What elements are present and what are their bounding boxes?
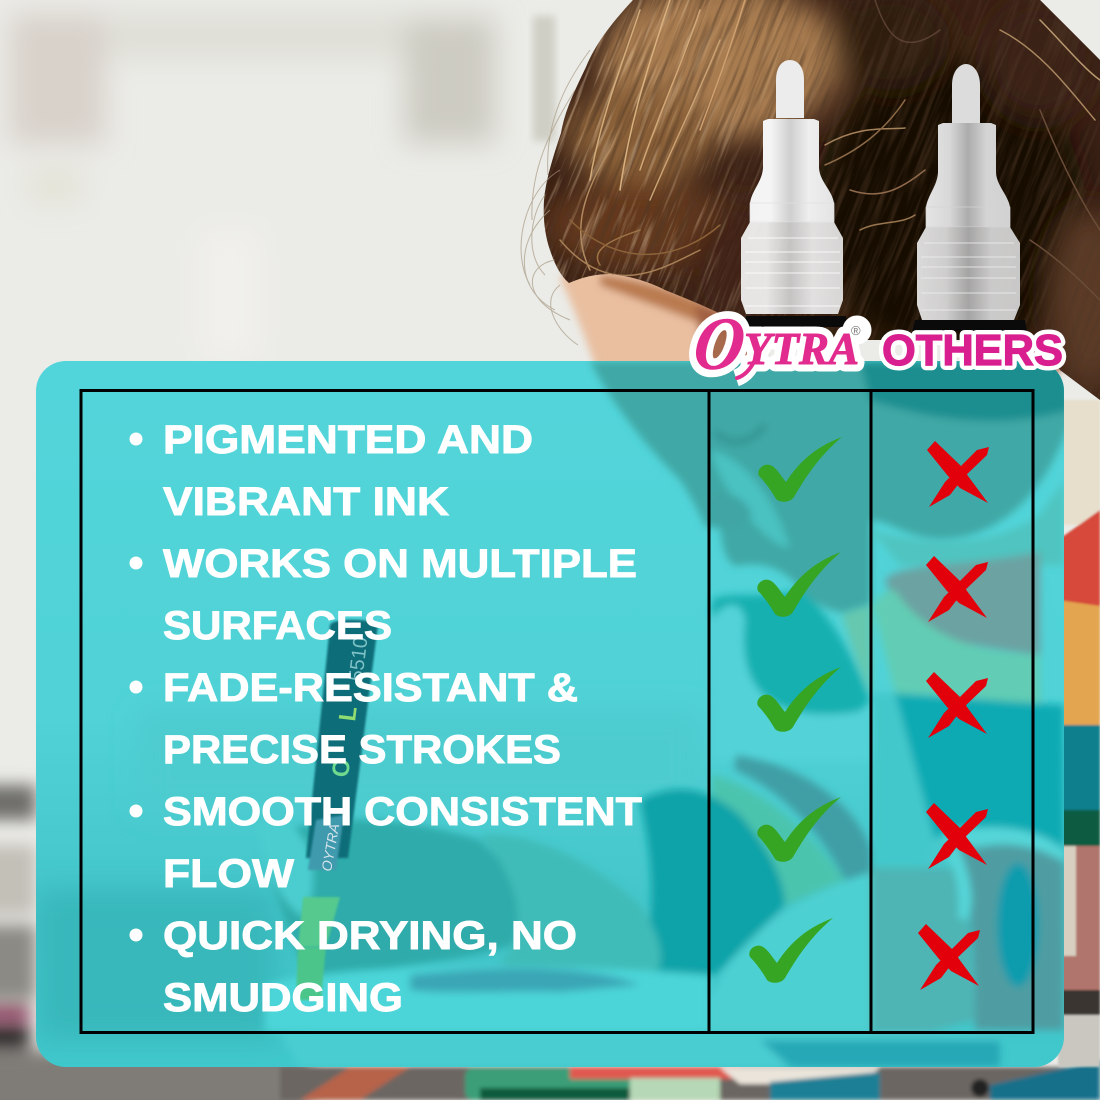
pen held by child: OYTRA [318,822,342,873]
icon: red cross marks column [918,441,989,990]
feature 2: WORKS ON MULTIPLE [163,542,637,586]
hair [544,0,1100,400]
skin: neck and ear [560,268,1062,375]
pen held by child: L [334,705,363,723]
pen held by child [296,620,378,1000]
feature list [130,418,642,1020]
feature 4 [130,790,642,896]
feature 4: FLOW [163,852,294,896]
logo: Oytra: YTRA [744,323,859,374]
label: OTHERS: OTHERS [882,326,1063,375]
logo: Oytra: YTRA [744,323,859,374]
pen held by child: C [327,758,356,779]
feature 3: PRECISE STROKES [163,728,561,772]
sweater right edge [1058,400,1100,1067]
logo: Oytra: O [689,301,751,386]
feature 1: PIGMENTED AND [163,418,533,462]
feature 3: FADE-RESISTANT & [163,666,578,710]
feature 5: SMUDGING [163,976,403,1020]
feature 1 [130,418,533,524]
feature 5: QUICK DRYING, NO [163,914,577,958]
pen held by child: 5510 [345,636,372,683]
marker tip: others [912,64,1027,331]
feature 5 [130,914,577,1020]
feature 4: SMOOTH CONSISTENT [163,790,642,834]
logo: Oytra [689,301,864,386]
hair strand texture: dark [544,0,1100,399]
logo: Oytra: O [689,301,751,386]
panel: translucent teal comparison panel [36,361,1070,1067]
feature 1: VIBRANT INK [163,480,449,524]
hair strand lines [560,0,1100,300]
feature 3 [130,666,578,772]
icon: green check marks column [749,437,842,983]
frizzy hair edge [521,50,590,345]
label: OTHERS: OTHERS [882,326,1063,375]
logo: Oytra: ® [851,323,861,338]
comparison table grid [81,390,1033,1033]
floor and markers [280,1060,1100,1100]
feature 2 [130,542,637,648]
feature 2: SURFACES [163,604,392,648]
marker tip: Oytra [741,60,848,327]
hair strand texture: light [544,0,817,318]
